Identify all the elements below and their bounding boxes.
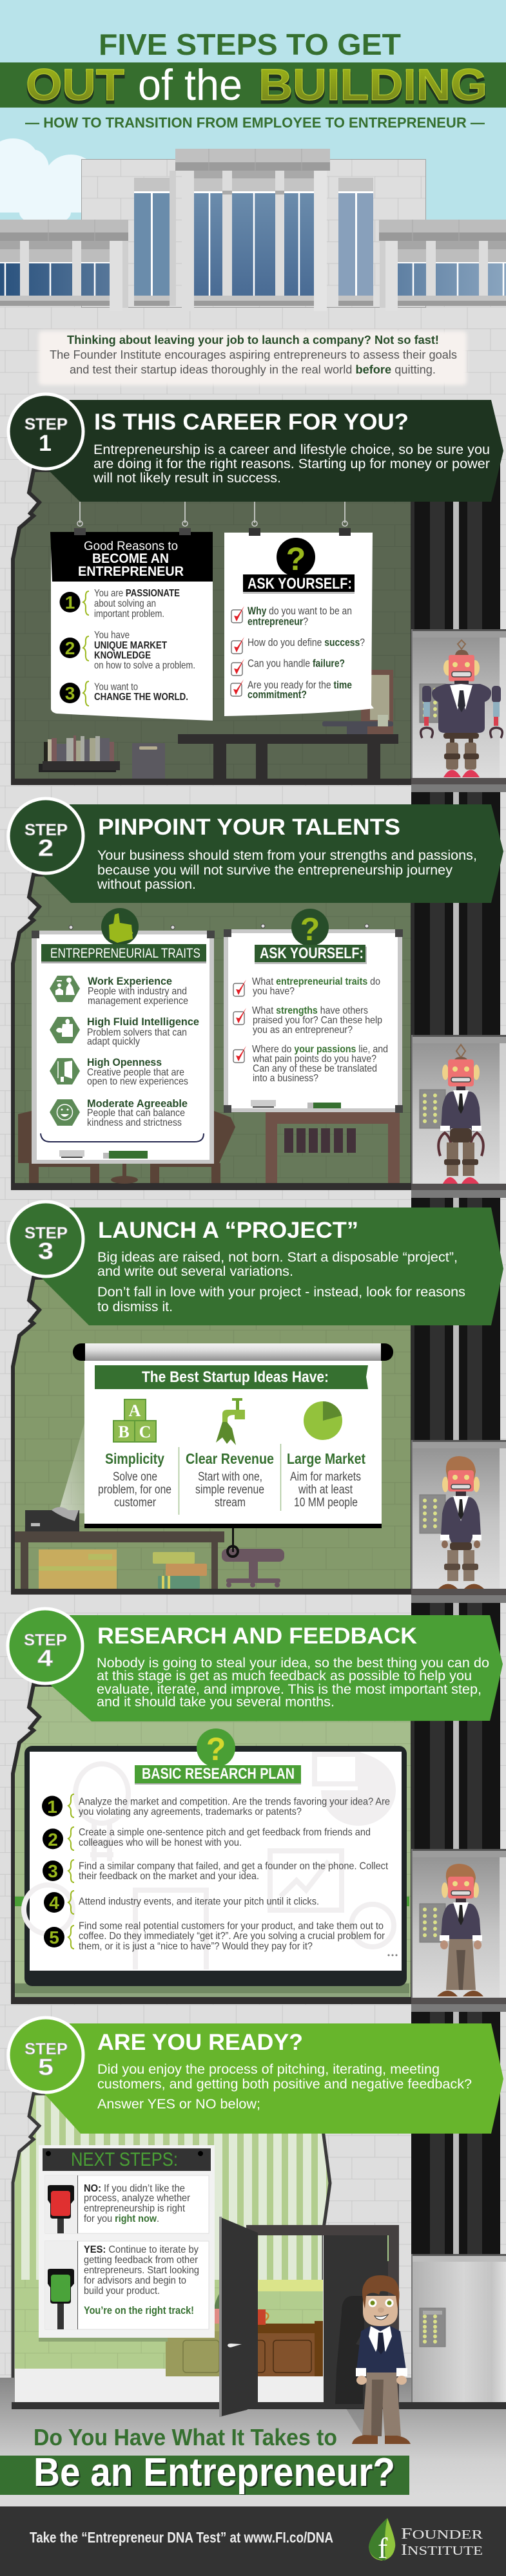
trait: high fluid intelligence: Problem solvers that can [87,1027,187,1038]
reason 1: You are PASSIONATE [94,588,180,599]
step 2 badge: 2 [38,835,54,861]
plan item 1: Analyze the market and competition. Are the trends favoring your idea? Are [79,1797,390,1808]
icon: question mark [277,538,315,577]
footer [0,2506,506,2576]
projector table [15,1531,224,1589]
question list: commitment? [248,689,307,701]
step 2 badge [8,799,83,873]
card: no [45,2175,209,2233]
man 4 in elevator [437,1864,483,1996]
icon: green light [48,2269,74,2329]
card: yes: YES: Continue to iterate by [84,2244,199,2255]
left tower window [134,178,170,306]
plan item 3 [43,1860,388,1882]
reason 2: UNIQUE MARKET [94,640,167,651]
reason 1 [59,588,180,620]
screen heading: The Best Startup Ideas Have: [142,1368,329,1386]
trait: high fluid intelligence: High Fluid Intelligence [87,1016,199,1028]
trait: work experience [50,975,188,1007]
card: yes: getting feedback from other [84,2255,199,2266]
reason 2: 2 [65,638,75,658]
step 5 banner [8,2018,503,2134]
plan item 4 [44,1891,319,1914]
icon: faucet with money [216,1398,245,1445]
step 4 body: at this stage is get as much feedback as possible to help you [97,1668,472,1683]
plan item 1: you violating any agreements, trademarks or patents? [79,1806,302,1817]
trait: moderate agreeable [50,1097,188,1128]
brown table [266,1112,400,1183]
trait: high fluid intelligence: adapt quickly [87,1036,140,1047]
reason 2 [59,630,195,671]
building [0,149,506,311]
traits label: ENTREPRENEURIAL TRAITS [50,946,200,961]
card: yes [45,2241,209,2329]
plan item 3: 3 [48,1861,58,1881]
logo mark: f [378,2532,388,2564]
question list: entrepreneur? [248,616,308,627]
step 5 body: Did you enjoy the process of pitching, iterating, meeting [97,2061,440,2077]
screen stand [228,1528,238,1557]
suit [356,2326,406,2372]
icon: thumbs up [101,908,139,945]
step 1 body: are doing it for the right reasons. Starting up for money or power [93,456,490,471]
desk [178,734,398,779]
plan item 5 [44,1920,385,1952]
intro text box: The Founder Institute encourages aspiring entrepreneurs to assess their goals [50,348,457,361]
bookshelf [39,735,120,772]
icon: question mark: ? [206,1731,226,1767]
question list: How do you define success? [248,637,365,649]
simplicity column [98,1450,171,1510]
room 4 [12,1685,413,2004]
elevator car 3 [411,1440,506,1603]
icon: question mark [291,909,329,947]
large market column: Aim for markets [290,1470,361,1484]
ellipsis [388,1954,397,1956]
door frame [246,2225,399,2403]
stacked books [153,1552,207,1589]
step 2 body: because you will not survive the entrepreneurship journey [97,862,452,878]
card: yes: build your product. [84,2286,160,2297]
step 1 body: Entrepreneurship is a career and lifestyle choice, so be sure you [93,442,490,457]
yellow box [39,1549,117,1589]
projector [25,1507,79,1531]
card: no: process, analyze whether [84,2193,191,2204]
trait: work experience: People with industry and [88,986,187,997]
card: no: entrepreneurship is right [84,2203,185,2214]
plan item 5: coffee. Do they immediately “get it?”. Are you solving a crucial problem for [79,1931,385,1942]
reason 3: 3 [65,683,75,703]
step 1 badge: 1 [39,431,52,456]
question list: into a business? [253,1073,318,1084]
eraser and marker [251,1100,341,1108]
central roof [175,149,330,171]
trait: high openness: High Openness [87,1056,162,1068]
step 4 badge: 4 [37,1645,53,1671]
question list: Can you handle failure? [248,658,345,670]
logo mark [369,2518,395,2564]
logo text: FOUNDER [401,2526,483,2543]
plan item 1 [42,1794,390,1817]
card: yes: for advisors and begin to [84,2275,186,2286]
icon: pie chart [304,1401,342,1440]
reason 1: 1 [65,592,75,612]
question list: Where do your passions lie, and [252,1044,388,1055]
icon: abc blocks [113,1399,156,1442]
clear revenue column: stream [215,1496,246,1510]
simplicity column: problem, for one [98,1483,171,1497]
question list: you as an entrepreneur? [253,1025,353,1036]
trait: high openness: Creative people that are [87,1067,184,1078]
large market column: with at least [298,1483,353,1497]
cloud [0,138,97,225]
office chair [222,1549,284,1587]
closing banner: Be an Entrepreneur? [35,2452,396,2496]
step 2 body [97,848,477,892]
step 5 badge: STEP [24,2040,68,2058]
plan item 5: 5 [49,1927,59,1947]
icon: question mark: ? [286,541,306,577]
watermark icons [24,1752,396,1969]
box [132,743,165,779]
step 2 body: without passion. [97,876,196,892]
right tower window [338,178,373,306]
trait: moderate agreeable: People that can balance [87,1108,185,1119]
reason 3: You want to [94,681,138,693]
plan item 3: their feedback on the market and your idea. [79,1871,259,1882]
logo text [401,2526,483,2559]
step 2 title: PINPOINT YOUR TALENTS [98,815,400,840]
step 4 title: RESEARCH AND FEEDBACK [97,1624,417,1649]
plan item 1: 1 [47,1797,57,1817]
step 5 body: customers, and getting both positive and negative feedback? [97,2076,472,2092]
chairs [18,1111,235,1184]
plan item 2: Create a simple one-sentence pitch and get feedback from friends and [79,1827,371,1838]
step 3 body [97,1249,465,1314]
title: out: OUT [26,60,124,109]
whiteboard: entrepreneurial traits [32,908,215,1164]
question list [231,605,365,701]
intro text box: Thinking about leaving your job to launch a company? Not so fast! [67,334,439,346]
step 3 badge: STEP [24,1224,68,1242]
legs [362,2371,401,2436]
dividers [179,1444,281,1515]
step 5 body [97,2061,472,2112]
next steps board [39,2145,215,2342]
open door [219,2217,258,2417]
reason 2: You have [94,630,130,641]
step 3 body: Don’t fall in love with your project - instead, look for reasons [97,1284,465,1300]
reason 2: on how to solve a problem. [94,660,195,671]
trait: high openness [50,1056,188,1087]
room 5 [13,2094,330,2409]
large market column [287,1450,365,1510]
step 1 body [93,442,490,486]
step 4 body: Nobody is going to steal your idea, so the best thing you can do [97,1655,489,1671]
icon: question mark: ? [300,911,320,947]
subtitle: — HOW TO TRANSITION FROM EMPLOYEE TO ENTREPRENEUR — [25,115,485,131]
elevator shaft [411,451,500,2254]
elevator car 2 [411,1035,506,1198]
icon: abc blocks: B [118,1423,130,1441]
floor [0,2378,506,2495]
mug [258,2309,268,2325]
step 1 title: IS THIS CAREER FOR YOU? [94,410,409,435]
next steps heading: NEXT STEPS: [71,2149,178,2170]
question list: What strengths have others [252,1005,368,1016]
question list: praised you for? Can these help [253,1015,382,1026]
clear revenue column [186,1450,274,1510]
shirt and tie [369,2326,392,2352]
question list [233,976,388,1084]
title: of the: of the [138,61,242,109]
face [363,2296,398,2326]
whiteboard: ask yourself [224,909,403,1113]
intro text box: and test their startup ideas thoroughly in the real world before quitting. [70,363,436,376]
reason 1: important problem. [94,609,164,620]
large market column: 10 MM people [294,1496,358,1510]
poster: good reasons: ENTREPRENEUR [78,564,184,579]
monitor [322,670,393,734]
background: sky [0,0,506,322]
room 1 [12,470,413,785]
icon: abc blocks: C [139,1423,151,1441]
question list: you have? [253,986,295,997]
step 4 badge: STEP [24,1631,67,1649]
step 1 body: will not likely result in success. [93,470,281,486]
man shadow [335,2296,371,2438]
step 3 title: LAUNCH A “PROJECT” [98,1218,358,1243]
step 3 body: and write out several variations. [97,1264,293,1279]
reason 3: CHANGE THE WORLD. [94,692,188,703]
step 3 badge [8,1202,83,1276]
question list: what pain points do you have? [252,1054,376,1065]
clear revenue column: simple revenue [195,1483,264,1497]
poster: good reasons: Good Reasons to [84,540,178,553]
left wing [0,220,128,311]
step 1 badge [8,394,83,469]
screen heading [95,1365,368,1389]
projection screen [73,1343,393,1528]
poster: good reasons [50,521,213,721]
plan item 3: Find a similar company that failed, and get a founder on the phone. Collect [79,1861,388,1871]
card: yes: You’re on the right track! [84,2304,194,2316]
elevator car 1 [411,629,506,792]
step 2 badge: STEP [24,821,68,839]
step 5 body: Answer YES or NO below; [97,2096,260,2112]
trait: moderate agreeable: kindness and strictness [87,1117,182,1128]
poster hangers [80,502,345,523]
plan item 2: 2 [48,1830,58,1850]
card: no: for you right now. [84,2213,159,2224]
robot 1 [421,640,502,777]
large market column: Large Market [287,1450,365,1467]
cuffs and hands [356,2368,366,2376]
robot 2 [438,1045,483,1184]
call to action: Take the “Entrepreneur DNA Test” at www.FI.co/DNA [30,2529,333,2546]
poster: ask yourself [224,521,374,716]
plan item 2: colleagues who will be honest with you. [79,1837,242,1848]
icon: question mark [197,1728,235,1767]
step 1 badge: STEP [24,415,68,433]
step 3 badge: 3 [38,1238,54,1264]
title: five steps to get: FIVE STEPS TO GET [99,28,401,61]
question list: Can any of these be translated [253,1063,377,1074]
elevator car 4 [411,1849,506,2012]
ask yourself label: ASK YOURSELF: [248,575,352,592]
closing banner: Be an Entrepreneur? [34,2450,395,2495]
step 4 banner [8,1609,503,1721]
logo text: INSTITUTE [401,2542,483,2559]
research plan label: BASIC RESEARCH PLAN [142,1765,295,1783]
question list: Why do you want to be an [248,605,352,617]
title band [0,60,506,113]
trait: high fluid intelligence [50,1016,199,1047]
reason 1: about solving an [94,598,156,609]
ask yourself label: ASK YOURSELF: [260,945,364,962]
plan item 5: Find some real potential customers for your product, and take them out to [79,1920,384,1932]
plan item 4: 4 [49,1893,59,1913]
step 1 banner [8,394,503,502]
simplicity column: Simplicity [105,1450,164,1467]
central windows [170,171,327,311]
room 2 [12,875,413,1190]
cabinet [166,2321,324,2376]
icon: abc blocks: A [129,1401,141,1420]
card: no: NO: If you didn’t like the [84,2183,185,2194]
question list: What entrepreneurial traits do [252,976,380,987]
clear revenue column: Start with one, [198,1470,262,1484]
reason 2: KNOWLEDGE [94,650,151,661]
step 2 banner [8,799,503,903]
plan item 5: them, or it is just a “nice to have”? Would they pay for it? [79,1941,313,1952]
step 4 badge [8,1609,83,1683]
step 5 title: ARE YOU READY? [97,2030,303,2055]
reason 3 [59,681,188,706]
step 5 badge [8,2018,83,2092]
trait: high openness: open to new experiences [87,1076,188,1087]
step 3 banner [8,1202,503,1325]
icon: red light [48,2185,74,2233]
plan item 4: Attend industry events, and iterate your pitch until it clicks. [79,1897,319,1908]
step 2 body: Your business should stem from your strengths and passions, [97,848,477,863]
step 4 body: and it should take you several months. [97,1694,335,1709]
intro text box [39,331,467,385]
step 3 body: to dismiss it. [97,1299,173,1314]
traits label [41,944,206,963]
title: building: BUILDING [258,60,487,109]
clear revenue column: Clear Revenue [186,1450,274,1467]
closing line: Do You Have What It Takes to [34,2424,337,2450]
trait: work experience: Work Experience [88,975,172,987]
monitor [24,1728,407,1986]
plan item 2 [43,1827,371,1850]
step 3 body: Big ideas are raised, not born. Start a disposable “project”, [97,1249,458,1265]
step 5 badge: 5 [38,2054,54,2080]
title: out: OUT [26,63,124,113]
trait: work experience: management experience [88,996,188,1007]
robot 3 [438,1456,484,1589]
projector beam [58,1423,84,1513]
eraser and marker [59,1150,148,1159]
simplicity column: customer [114,1496,157,1510]
step 4 body: evaluate, iterate, and improve. This is the most important step, [97,1681,482,1697]
trait: moderate agreeable: Moderate Agreeable [87,1097,188,1110]
elevator panel [420,2308,445,2347]
shoes [352,2435,411,2444]
room 3 [12,1278,413,1595]
question list: Are you ready for the time [248,679,352,691]
poster: good reasons: BECOME AN [92,551,169,566]
right wing [379,220,506,311]
simplicity column: Solve one [113,1470,157,1484]
step 4 body [97,1655,489,1709]
plant [202,2294,219,2324]
card: yes: entrepreneurs. Start looking [84,2265,199,2276]
entrepreneur character [352,2275,411,2444]
lower wall strip [0,2495,506,2506]
final elevator [399,2254,506,2409]
title: building: BUILDING [258,63,487,113]
